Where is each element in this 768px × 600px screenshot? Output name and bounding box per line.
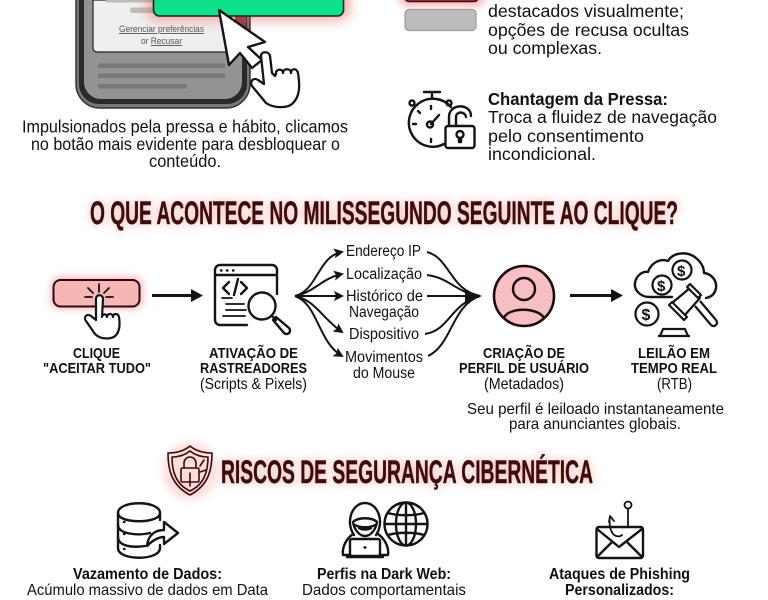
step: user profile creation — [459, 266, 589, 393]
list: collected data points: Localização — [346, 266, 422, 283]
list: collected data points: Endereço IP — [346, 243, 421, 260]
label — [200, 344, 307, 393]
text: Personalizados: — [565, 582, 674, 599]
icon: cloud, coins and gavel: $ — [642, 307, 650, 324]
text block: visual highlight: ou complexas. — [488, 38, 602, 58]
label: (RTB) — [657, 376, 692, 393]
text block: urgency blackmail: Troca a fluidez de navegação — [488, 107, 717, 127]
panel: personalized phishing — [549, 502, 690, 599]
text — [549, 566, 690, 599]
text block: auction note: Seu perfil é leiloado instantaneamente — [467, 401, 724, 418]
green accept button — [148, 0, 349, 20]
arrows: converge to profile — [425, 252, 482, 356]
text block: urgency blackmail — [488, 89, 717, 164]
icon: broken shield with padlock — [163, 442, 217, 500]
icon: highlighted and hidden buttons — [400, 0, 484, 30]
label: CRIAÇÃO DE — [483, 344, 565, 362]
label: LEILÃO EM — [638, 344, 710, 362]
label — [631, 344, 717, 393]
icon: user profile circle — [494, 266, 554, 326]
arrow head — [611, 289, 623, 302]
text block: impulse caption: no botão mais evidente para desbloquear o — [31, 134, 340, 154]
label: RASTREADORES — [200, 360, 307, 377]
label — [459, 344, 589, 393]
label: ATIVAÇÃO DE — [209, 344, 298, 362]
list: collected data points: Histórico de — [346, 288, 423, 305]
list: collected data points: Dispositivo — [349, 326, 419, 343]
icon: database with share arrow — [118, 503, 178, 558]
consent dialog: or Recusar — [141, 36, 182, 46]
icon: stopwatch and open padlock — [409, 92, 474, 148]
step: real time bidding — [631, 253, 717, 393]
panel: impulse click phone illustration — [76, 0, 349, 108]
consent dialog: Gerenciar preferências — [119, 24, 204, 34]
step: click accept all — [43, 277, 151, 377]
text block: visual highlight: opções de recusa ocultas — [488, 20, 689, 40]
icon: cloud, coins and gavel: $ — [657, 278, 666, 295]
panel: dark web profiles — [302, 502, 466, 599]
text: Dados comportamentais — [302, 582, 466, 599]
text: Perfis na Dark Web: — [317, 566, 451, 583]
text block: impulse caption: Impulsionados pela pressa e hábito, clicamos — [22, 116, 348, 136]
text block: auction note: para anunciantes globais. — [509, 416, 681, 433]
text block: auction note — [467, 401, 724, 433]
text block: urgency blackmail: Chantagem da Pressa: — [488, 89, 668, 109]
text — [27, 566, 268, 599]
panel: data leak — [27, 503, 268, 599]
label: CLIQUE — [73, 345, 120, 362]
list: collected data points: do Mouse — [353, 365, 415, 382]
arrow: click to trackers — [152, 294, 192, 297]
icon: pressed button with hand — [51, 277, 143, 338]
text block: visual highlight: destacados visualmente; — [488, 1, 684, 21]
label: TEMPO REAL — [631, 360, 717, 377]
text block: impulse caption: conteúdo. — [149, 151, 221, 171]
label: (Metadados) — [484, 376, 564, 393]
list: collected data points — [345, 243, 423, 382]
text: Ataques de Phishing — [549, 566, 690, 583]
icon: code window with magnifier — [215, 265, 290, 334]
text: Vazamento de Dados: — [73, 566, 222, 583]
text block: urgency blackmail: pelo consentimento — [488, 126, 644, 146]
label: "ACEITAR TUDO" — [43, 360, 151, 377]
icon: hooded hacker with laptop and globe — [343, 502, 428, 557]
arrow: profile to auction — [570, 294, 612, 297]
step: tracker activation — [200, 265, 307, 393]
label — [43, 345, 151, 377]
icon: cursor arrow — [219, 10, 265, 68]
text: Acúmulo massivo de dados em Data — [27, 582, 268, 599]
arrows: fan out to data points — [295, 252, 342, 356]
text block: impulse caption — [22, 116, 348, 171]
label: PERFIL DE USUÁRIO — [459, 360, 589, 377]
text — [302, 566, 466, 599]
text block: urgency blackmail: incondicional. — [488, 144, 596, 164]
icon: pointing hand — [251, 52, 299, 107]
list: collected data points: Movimentos — [345, 349, 423, 366]
text block: visual highlight — [488, 1, 689, 58]
list: collected data points: Navegação — [349, 304, 419, 321]
icon: cloud, coins and gavel: $ — [677, 263, 686, 280]
icon: envelope on fishing hook — [596, 502, 643, 558]
label: (Scripts & Pixels) — [200, 376, 307, 393]
arrow head — [191, 289, 203, 302]
consent dialog — [93, 0, 236, 52]
phone body — [76, 0, 250, 108]
icon: cloud, coins and gavel — [635, 253, 717, 336]
